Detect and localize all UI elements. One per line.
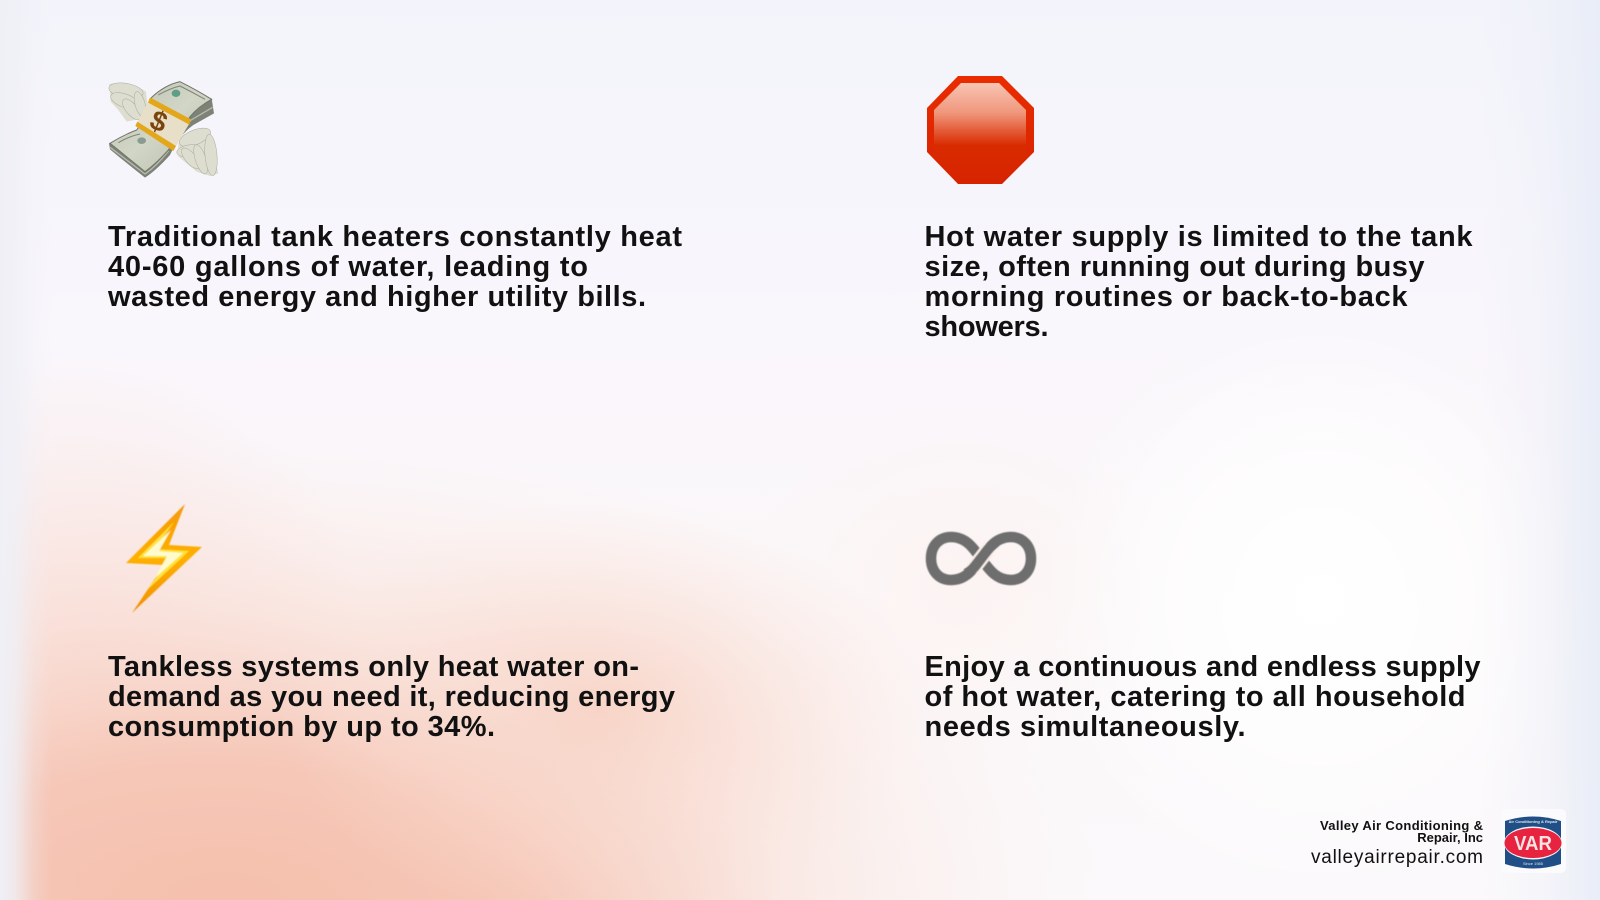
company name and website: Repair, Inc [1417, 830, 1483, 845]
text: tankless saves energy [108, 651, 675, 743]
logo badge: Air Conditioning & Repair [1509, 819, 1558, 824]
text: limited hot water supply: morning routines or back-to-back [924, 281, 1408, 313]
icon: red stop octagon [927, 76, 1034, 184]
text: endless hot water: needs simultaneously. [924, 711, 1246, 743]
text: tankless saves energy: Tankless systems only heat water on- [108, 651, 639, 683]
company name and website: valleyairrepair.com [1311, 847, 1483, 868]
logo badge [1501, 809, 1566, 873]
bill stack [109, 82, 214, 178]
logo badge: Since 1985 [1523, 861, 1544, 866]
wings [108, 80, 219, 176]
text: tank heaters waste energy: 40-60 gallons of water, leading to [108, 251, 588, 283]
icon: infinity symbol [931, 537, 1031, 580]
text: tank heaters waste energy: Traditional tank heaters constantly heat [108, 221, 682, 253]
text: limited hot water supply: size, often running out during busy [924, 251, 1424, 283]
logo badge: VAR [1514, 833, 1553, 855]
company name and website [1311, 818, 1483, 868]
icon: flying money [108, 80, 219, 178]
text: tankless saves energy: consumption by up to 34%. [108, 711, 495, 743]
text: endless hot water: of hot water, catering to all household [924, 681, 1466, 713]
text: tank heaters waste energy [107, 221, 682, 313]
text: limited hot water supply: Hot water supply is limited to the tank [924, 221, 1473, 253]
icon: lightning bolt [126, 504, 202, 613]
text: endless hot water: Enjoy a continuous and endless supply [924, 651, 1480, 683]
text: limited hot water supply [924, 221, 1473, 343]
text: limited hot water supply: showers. [924, 311, 1048, 343]
paper band with dollar sign: $ [146, 104, 172, 139]
text: tankless saves energy: demand as you need it, reducing energy [108, 681, 675, 713]
company name and website: Valley Air Conditioning & [1320, 818, 1483, 833]
text: endless hot water [924, 651, 1480, 743]
text: tank heaters waste energy: wasted energy and higher utility bills. [107, 281, 646, 313]
